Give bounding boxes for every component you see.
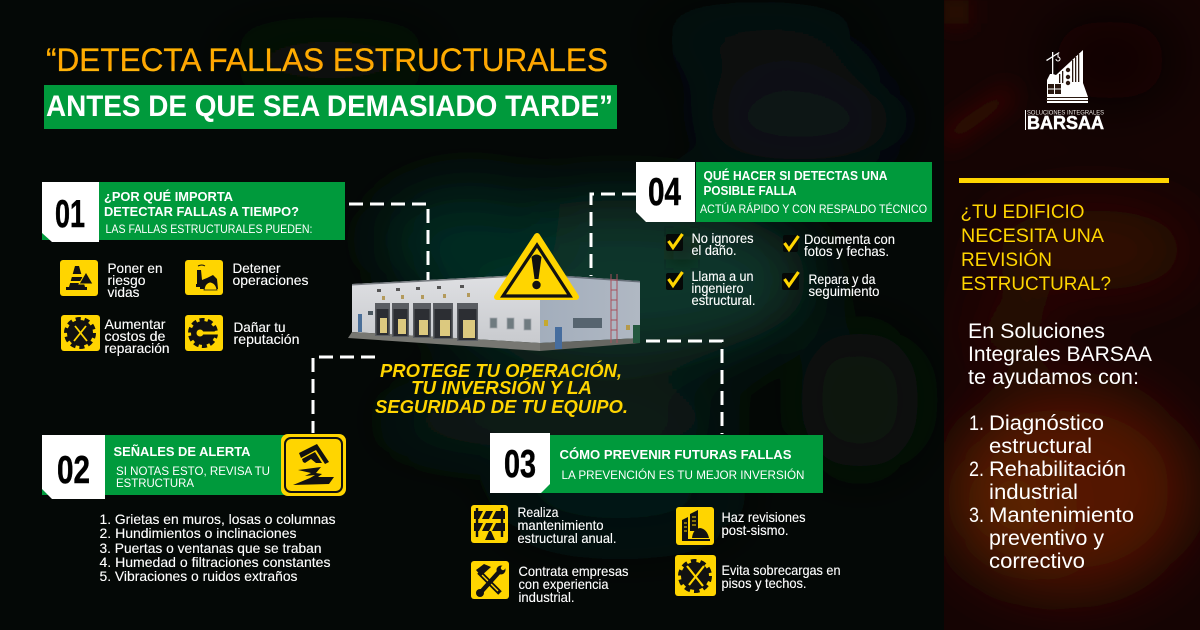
header 03: CÓMO PREVENIR FUTURAS FALLAS bbox=[560, 447, 792, 462]
text: poner en riesgo vidas: Poner en bbox=[108, 260, 162, 276]
text: dañar tu reputación: reputación bbox=[234, 331, 300, 347]
list: señales: 1. Grietas en muros, losas o columnas bbox=[100, 511, 336, 527]
call to action question: ESTRUCTURAL? bbox=[961, 274, 1111, 295]
text: no ignores el daño bbox=[692, 230, 754, 258]
text: poner en riesgo vidas: vidas bbox=[108, 284, 140, 300]
header 01: 01 bbox=[55, 193, 85, 236]
lights and signs bbox=[377, 285, 470, 300]
slogan bbox=[375, 360, 628, 417]
left wall bbox=[352, 274, 540, 343]
panel 03: cómo prevenir bbox=[471, 433, 840, 605]
services list: 1. bbox=[969, 412, 984, 435]
icon: buildings and helmet bbox=[676, 507, 714, 545]
check 2 bbox=[783, 235, 798, 252]
icon: factory bbox=[185, 260, 223, 295]
connector 03 bbox=[625, 341, 722, 434]
text: detener operaciones: operaciones bbox=[232, 272, 308, 288]
slogan: SEGURIDAD DE TU EQUIPO. bbox=[375, 396, 628, 417]
right panel background bbox=[944, 0, 1200, 630]
text: contrata empresas bbox=[518, 563, 628, 605]
header 04: QUÉ HACER SI DETECTAS UNA bbox=[704, 168, 888, 183]
background: blurred dark warehouse bbox=[270, 30, 918, 518]
header 03: LA PREVENCIÓN ES TU MEJOR INVERSIÓN bbox=[562, 469, 804, 482]
text: llama a un ingeniero estructural: estructural. bbox=[692, 292, 756, 308]
connector 01 bbox=[349, 204, 428, 281]
header 04: 04 bbox=[648, 171, 681, 214]
logo building bbox=[1046, 50, 1088, 103]
text: haz revisiones: post-sismo. bbox=[722, 522, 788, 538]
text: realiza mantenimiento: mantenimiento bbox=[518, 517, 604, 533]
text: evita sobrecargas: Evita sobrecargas en bbox=[722, 562, 840, 578]
icon: gear with tools bbox=[675, 555, 716, 596]
icon: gear and key bbox=[185, 315, 223, 351]
header 04: ACTÚA RÁPIDO Y CON RESPALDO TÉCNICO bbox=[700, 203, 927, 216]
call to action question: NECESITA UNA bbox=[961, 226, 1104, 247]
slogan: TU INVERSIÓN Y LA bbox=[411, 377, 592, 398]
services list: industrial bbox=[989, 481, 1078, 504]
text: realiza mantenimiento: Realiza bbox=[518, 504, 559, 520]
services list: Mantenimiento bbox=[989, 504, 1134, 527]
text: aumentar costos de reparación bbox=[104, 316, 170, 356]
text: contrata empresas: industrial. bbox=[518, 589, 574, 605]
icon: cone bbox=[60, 260, 98, 296]
text: realiza mantenimiento bbox=[518, 504, 616, 546]
text: no ignores el daño: No ignores bbox=[692, 230, 754, 246]
loading doors bbox=[375, 303, 478, 341]
header 02 bbox=[42, 435, 284, 499]
call to action question: REVISIÓN bbox=[961, 249, 1052, 271]
icon: hammer and wrench bbox=[471, 561, 509, 599]
check 3 bbox=[666, 272, 683, 290]
list: señales: 5. Vibraciones o ruidos extraños bbox=[100, 568, 298, 584]
header 04: POSIBLE FALLA bbox=[704, 183, 797, 198]
services list bbox=[969, 412, 1134, 573]
text: poner en riesgo vidas: riesgo bbox=[108, 272, 146, 288]
text: aumentar costos de reparación: costos de bbox=[104, 328, 166, 344]
text: documenta con fotos y fechas: fotos y fechas. bbox=[804, 243, 889, 259]
header 01 bbox=[42, 182, 345, 242]
list: señales: 2. Hundimientos o inclinaciones bbox=[100, 525, 296, 541]
call to action question: ¿TU EDIFICIO bbox=[960, 202, 1084, 223]
text: haz revisiones: Haz revisiones bbox=[722, 509, 806, 525]
header 03: 03 bbox=[504, 443, 536, 486]
header 02: 02 bbox=[57, 449, 90, 492]
header 04 bbox=[636, 162, 932, 222]
services list: correctivo bbox=[989, 550, 1085, 573]
plinth bbox=[348, 332, 540, 351]
header 01: ¿POR QUÉ IMPORTA bbox=[104, 189, 234, 204]
text: realiza mantenimiento: estructural anual. bbox=[518, 530, 616, 546]
text: poner en riesgo vidas bbox=[108, 260, 162, 300]
text: repara y da seguimiento: seguimiento bbox=[808, 283, 880, 299]
text: repara y da seguimiento bbox=[808, 271, 880, 299]
check 4 bbox=[782, 272, 799, 290]
text: llama a un ingeniero estructural: ingeniero bbox=[692, 280, 744, 296]
check 1 bbox=[666, 234, 683, 251]
text: dañar tu reputación: Dañar tu bbox=[234, 319, 286, 335]
header 02: SI NOTAS ESTO, REVISA TU bbox=[116, 466, 270, 478]
text: documenta con fotos y fechas: Documenta con bbox=[804, 231, 895, 247]
panel 01: por qué importa bbox=[42, 182, 345, 356]
text: llama a un ingeniero estructural: Llama a un bbox=[692, 268, 754, 284]
title line 2 with green band: ANTES DE QUE SEA DEMASIADO TARDE” bbox=[46, 90, 613, 123]
header 01: DETECTAR FALLAS A TIEMPO? bbox=[104, 204, 299, 219]
intro text bbox=[968, 320, 1152, 389]
right wall bbox=[540, 274, 640, 343]
list: señales bbox=[100, 511, 336, 584]
icon: barricade bbox=[471, 505, 508, 543]
connector 02 bbox=[313, 357, 375, 433]
text: haz revisiones bbox=[722, 509, 806, 538]
logo: Soluciones Integrales BARSAA: BARSAA bbox=[1027, 113, 1104, 133]
text: repara y da seguimiento: Repara y da bbox=[808, 271, 876, 287]
services list: Diagnóstico bbox=[989, 412, 1104, 435]
logo: Soluciones Integrales BARSAA bbox=[1025, 50, 1105, 133]
illustration: warehouse bbox=[348, 274, 640, 351]
header 01: LAS FALLAS ESTRUCTURALES PUEDEN: bbox=[106, 224, 312, 236]
text: llama a un ingeniero estructural bbox=[692, 268, 756, 308]
yellow divider bbox=[959, 178, 1169, 183]
text: contrata empresas: con experiencia bbox=[518, 576, 609, 592]
text: contrata empresas: Contrata empresas bbox=[518, 563, 628, 579]
text: no ignores el daño: el daño. bbox=[692, 242, 736, 258]
intro text: En Soluciones bbox=[968, 320, 1105, 343]
text: evita sobrecargas: pisos y techos. bbox=[722, 575, 806, 591]
panel 02: señales de alerta bbox=[42, 434, 346, 584]
text: aumentar costos de reparación: reparación bbox=[104, 340, 170, 356]
icon: warning triangle bbox=[497, 236, 576, 297]
list: señales: 3. Puertas o ventanas que se traban bbox=[100, 540, 322, 556]
title line 1: “DETECTA FALLAS ESTRUCTURALES bbox=[46, 42, 608, 78]
call to action question bbox=[960, 202, 1111, 295]
header 03 bbox=[490, 433, 823, 493]
logo: Soluciones Integrales BARSAA: SOLUCIONES INTEGRALES bbox=[1027, 110, 1105, 116]
services list: estructural bbox=[989, 435, 1092, 458]
text: detener operaciones: Detener bbox=[232, 260, 281, 276]
services list: preventivo y bbox=[989, 527, 1104, 550]
side details bbox=[358, 314, 362, 332]
header 02: SEÑALES DE ALERTA bbox=[114, 444, 251, 459]
services list: 3. bbox=[969, 504, 984, 527]
text: documenta con fotos y fechas bbox=[804, 231, 895, 259]
icon: collapsing house bbox=[281, 434, 346, 496]
text: evita sobrecargas bbox=[722, 562, 840, 591]
services list: 2. bbox=[969, 458, 984, 481]
list: señales: 4. Humedad o filtraciones constantes bbox=[100, 554, 330, 570]
intro text: Integrales BARSAA bbox=[968, 343, 1152, 366]
text: aumentar costos de reparación: Aumentar bbox=[104, 316, 166, 332]
intro text: te ayudamos con: bbox=[968, 366, 1139, 389]
text: dañar tu reputación bbox=[234, 319, 300, 347]
windows bbox=[490, 318, 531, 330]
icon: gear and tools bbox=[61, 315, 100, 351]
red ladder bbox=[611, 274, 617, 343]
slogan: PROTEGE TU OPERACIÓN, bbox=[380, 360, 622, 381]
connector 04 bbox=[591, 194, 636, 276]
panel 04: qué hacer bbox=[636, 162, 932, 308]
services list: Rehabilitación bbox=[989, 458, 1126, 481]
header 02: ESTRUCTURA bbox=[116, 478, 194, 490]
text: detener operaciones bbox=[232, 260, 308, 288]
